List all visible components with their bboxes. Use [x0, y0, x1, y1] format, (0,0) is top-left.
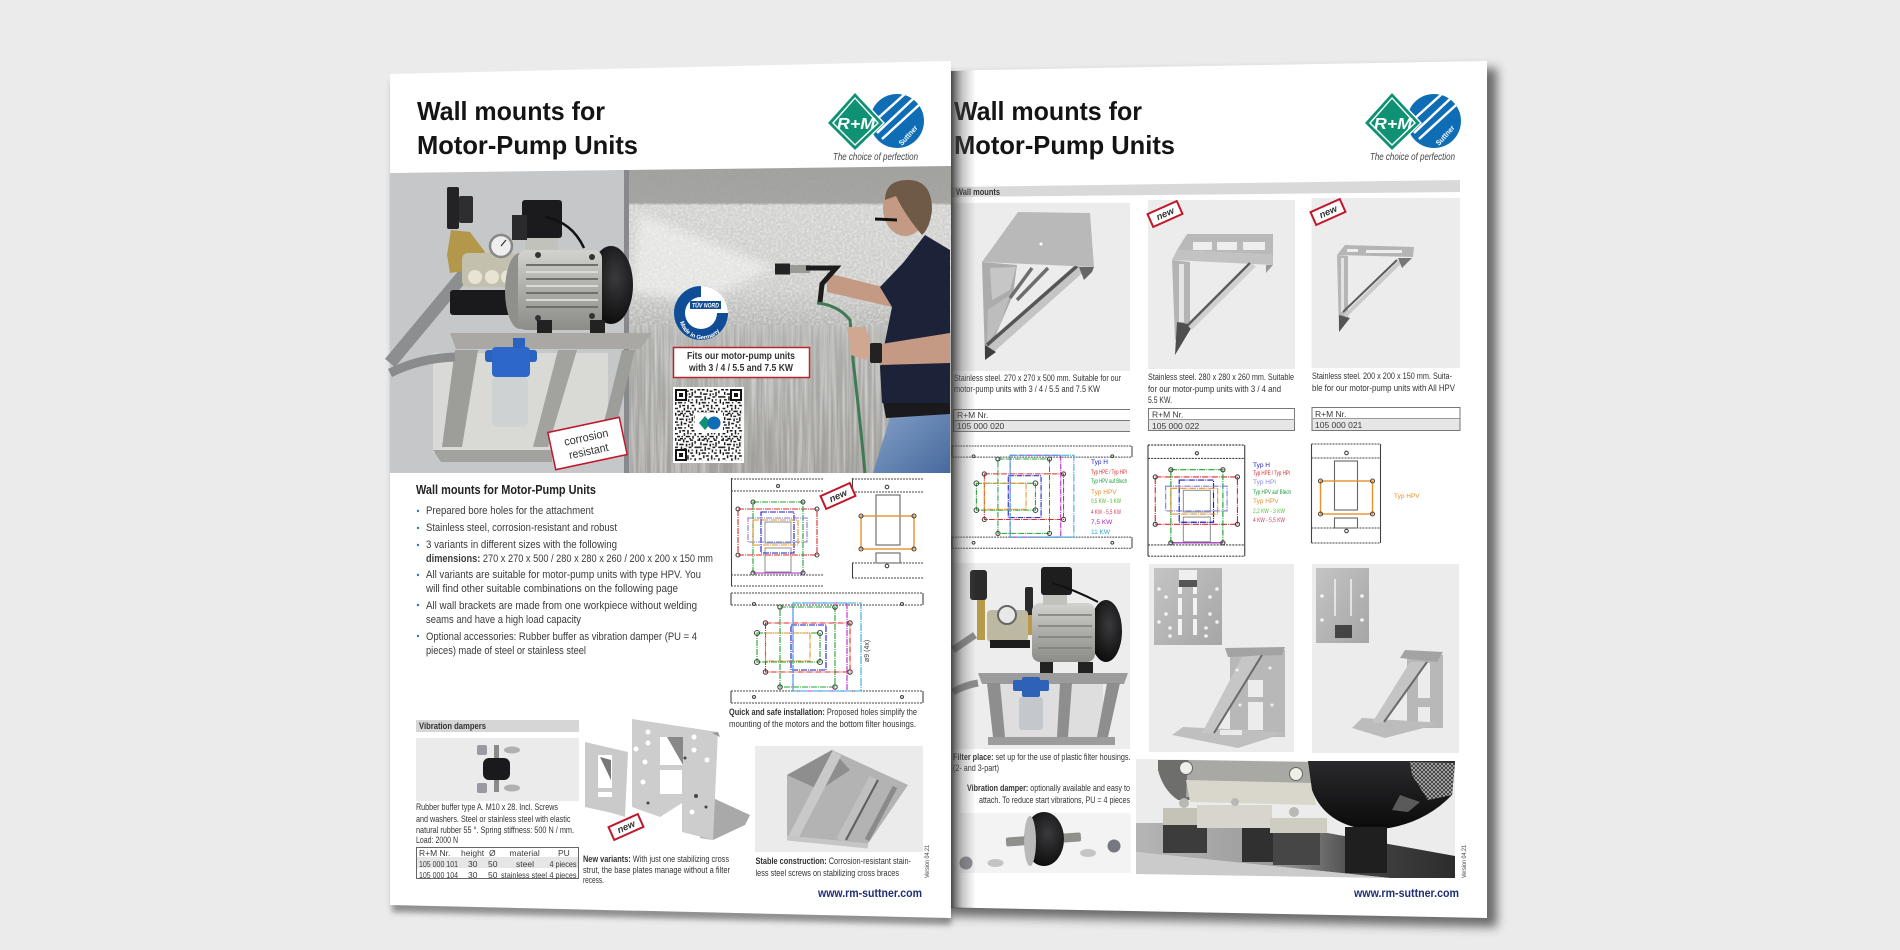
diagram 2 legend	[1253, 462, 1291, 524]
sticker: corrosion resistant: resistant	[568, 442, 610, 462]
new tag	[609, 814, 643, 840]
page shadow	[945, 68, 1497, 927]
website url: www.rm-suttner.com	[817, 888, 922, 900]
new tag	[1148, 201, 1182, 227]
heading: Wall mounts for Motor-Pump Units	[416, 483, 596, 497]
title	[417, 96, 638, 160]
caption 3	[1312, 371, 1455, 393]
table: vibration dampers: height	[461, 848, 485, 858]
rubber buffer description: natural rubber 55 °. Spring stiffness: 500 N / mm.	[416, 825, 574, 835]
callout: fits motor pump units: Fits our motor-pump units	[687, 350, 795, 362]
product image 270 x 270 x 500	[951, 203, 1130, 371]
table: article number 2: R+M Nr.	[1152, 410, 1183, 420]
table: vibration dampers: 4 pieces	[550, 870, 576, 880]
photo: bracket 280 flat and mounted	[1149, 564, 1294, 752]
panel: right brochure page	[930, 61, 1497, 927]
water filter	[485, 338, 537, 427]
new variants caption: New variants: With just one stabilizing cross	[583, 854, 729, 864]
wall bracket	[433, 333, 652, 462]
caption 2: 5.5 KW.	[1148, 395, 1172, 405]
version note: Version 04.21	[1462, 844, 1468, 878]
bullet list: will find other suitable combinations on the following page	[425, 583, 678, 595]
diagram 1 legend: Typ HPV auf Blech	[1091, 478, 1127, 485]
shadow from left page	[951, 70, 976, 909]
drilling diagram B	[852, 478, 923, 578]
bullet list: All wall brackets are made from one workpiece without welding	[426, 600, 697, 612]
new variants caption	[583, 854, 730, 885]
drilling diagram C: ø9 (4x)	[864, 640, 871, 662]
photo caption: vibration damper	[967, 783, 1130, 805]
section band: vibration dampers	[416, 720, 579, 732]
section band: wall mounts: Wall mounts	[956, 187, 1000, 197]
diagram 2 legend: Typ HPE / Typ HPI	[1253, 470, 1290, 477]
caption 1: motor-pump units with 3 / 4 / 5.5 and 7.5 KW	[954, 384, 1100, 394]
table: vibration dampers: steel	[516, 859, 534, 869]
table: article number 3	[1312, 408, 1460, 431]
page sheet	[930, 61, 1487, 918]
diagram 1 legend: Typ H	[1091, 459, 1108, 466]
table: vibration dampers	[416, 848, 579, 880]
website url: www.rm-suttner.com	[1353, 888, 1459, 900]
stable construction caption	[756, 856, 911, 878]
logo: R+M	[837, 116, 876, 133]
new variants caption: recess.	[583, 875, 604, 885]
table: vibration dampers: PU	[558, 848, 570, 858]
motor-pump unit	[447, 187, 633, 333]
photo: bracket 200 flat and mounted	[1312, 564, 1459, 753]
technician	[775, 180, 950, 473]
panel: left brochure page	[385, 61, 954, 928]
image: stable construction	[755, 746, 923, 852]
drilling diagram 3	[1312, 444, 1380, 543]
caption 1: Stainless steel. 270 x 270 x 500 mm. Suitable for our	[954, 373, 1121, 383]
page sheet	[390, 61, 951, 918]
rubber buffer description	[416, 802, 574, 845]
installation caption: Quick and safe installation: Proposed holes simplify the	[729, 707, 917, 717]
new tag: new	[616, 818, 638, 836]
photo caption: filter place: Filter place: set up for the use of plastic filter housings.	[953, 752, 1130, 762]
table: article number 3: 105 000 021	[1315, 420, 1363, 430]
certification badge: Made in Germany	[680, 321, 720, 340]
photo caption: vibration damper: Vibration damper: optionally available and easy to	[967, 783, 1130, 793]
diagram 1 legend: 0,5 KW - 3 KW	[1091, 498, 1122, 505]
logo: R+M	[1374, 116, 1413, 133]
new variants caption: strut, the base plates manage without a filter	[583, 865, 730, 875]
diagram 2 legend: 4 KW - 5,5 KW	[1253, 517, 1286, 524]
diagram 2 legend: 2,2 KW - 3 KW	[1253, 508, 1286, 515]
title: Wall mounts for	[417, 96, 605, 126]
title	[954, 96, 1175, 160]
table: article number 2	[1148, 408, 1295, 431]
bullet list: Prepared bore holes for the attachment	[426, 505, 594, 517]
caption 2: Stainless steel. 280 x 280 x 260 mm. Suitable	[1148, 372, 1294, 382]
stable construction caption: less steel screws on stabilizing cross braces	[756, 868, 899, 878]
rubber buffer description: and washers. Steel or stainless steel with elastic	[416, 814, 571, 824]
diagram 3 legend: Typ HPV	[1394, 493, 1420, 500]
diagram 1 legend: 4 KW - 5,5 KW	[1091, 509, 1122, 516]
QR code	[673, 387, 744, 463]
table: article number 3: R+M Nr.	[1315, 409, 1346, 419]
caption 2: for our motor-pump units with 3 / 4 and	[1148, 384, 1281, 394]
product image 280 x 280 x 260	[1148, 200, 1295, 369]
new tag	[821, 483, 855, 509]
text block: product features	[416, 483, 713, 657]
rubber buffer description: Load: 2000 N	[416, 835, 458, 845]
suction hoses	[390, 273, 465, 373]
sprayed wall	[629, 166, 951, 473]
photo caption: filter place	[953, 752, 1130, 773]
photo: motor feet close-up	[1136, 759, 1455, 878]
product image 200 x 200 x 150	[1312, 198, 1460, 368]
bullet list: seams and have a high load capacity	[426, 614, 581, 626]
caption 3: Stainless steel. 200 x 200 x 150 mm. Suita-	[1312, 371, 1452, 381]
diagram 1 legend: 7,5 KW	[1091, 519, 1113, 526]
bullet list: All variants are suitable for motor-pump units with type HPV. You	[426, 569, 701, 581]
title: Motor-Pump Units	[954, 130, 1175, 160]
section band: vibration dampers: Vibration dampers	[419, 721, 486, 731]
diagram 1 legend: Typ HPV	[1091, 489, 1117, 496]
table: article number 1: 105 000 020	[957, 421, 1005, 431]
caption 1	[954, 373, 1121, 394]
section band: wall mounts	[951, 180, 1460, 197]
bullet list: dimensions: 270 x 270 x 500 / 280 x 280 x 260 / 200 x 200 x 150 mm	[426, 553, 713, 565]
table: article number 1	[953, 409, 1130, 432]
table: vibration dampers: stainless steel	[501, 870, 547, 880]
spray fan	[632, 214, 776, 302]
new tag: new	[1155, 205, 1177, 223]
diagram 2 legend: Typ HPV	[1253, 498, 1279, 505]
logo	[826, 91, 924, 163]
bullet list: Stainless steel, corrosion-resistant and robust	[426, 522, 617, 534]
drilling diagram 1	[952, 446, 1132, 548]
new tag: new	[828, 487, 850, 505]
callout: fits motor pump units	[674, 348, 810, 378]
diagram 1 legend	[1091, 459, 1127, 536]
table: vibration dampers: R+M Nr.	[419, 848, 450, 858]
installation caption: mounting of the motors and the bottom filter housings.	[729, 719, 916, 729]
table: vibration dampers: 50	[488, 870, 498, 880]
page shadow	[392, 70, 951, 925]
image: new bracket variants	[585, 719, 750, 840]
bullet list: pieces) made of steel or stainless steel	[426, 645, 586, 657]
logo	[1363, 91, 1461, 163]
photo caption: vibration damper: attach. To reduce start vibrations, PU = 4 pieces	[979, 795, 1130, 805]
table: article number 1: R+M Nr.	[957, 410, 988, 420]
drilling diagram 2	[1148, 445, 1245, 556]
drilling diagram A	[731, 478, 824, 586]
title: Motor-Pump Units	[417, 130, 638, 160]
callout: fits motor pump units: with 3 / 4 / 5.5 and 7.5 KW	[688, 362, 793, 374]
hero photo	[385, 166, 951, 474]
studio backdrop	[390, 170, 624, 473]
sticker: corrosion resistant	[548, 417, 627, 470]
bullet list: 3 variants in different sizes with the following	[426, 539, 617, 551]
bullet list	[417, 505, 713, 657]
version note: Version 04.21	[925, 844, 931, 878]
caption 3: ble for our motor-pump units with All HPV	[1312, 383, 1455, 393]
diagram 1 legend: 11 KW	[1091, 529, 1111, 536]
table: article number 2: 105 000 022	[1152, 421, 1200, 431]
caption 2	[1148, 372, 1294, 405]
table: vibration dampers: material	[510, 848, 540, 858]
photo: motor-pump unit on bracket	[951, 563, 1130, 749]
photo caption: filter place: (2- and 3-part)	[953, 763, 999, 773]
logo: Suttner	[897, 123, 920, 147]
certification badge	[674, 286, 728, 340]
logo: The choice of perfection	[833, 152, 918, 163]
table: vibration dampers: 105 000 101	[419, 859, 458, 869]
table: vibration dampers: 105 000 104	[419, 870, 458, 880]
table: vibration dampers: 50	[488, 859, 498, 869]
installation caption	[729, 707, 917, 729]
logo: Suttner	[1434, 123, 1457, 147]
diagram 2 legend: Typ HPI	[1253, 479, 1276, 486]
table: vibration dampers: Ø	[489, 848, 496, 858]
rubber buffer description: Rubber buffer type A. M10 x 28. Incl. Screws	[416, 802, 558, 812]
photo: vibration damper	[960, 812, 1130, 873]
sticker: corrosion resistant: corrosion	[563, 428, 610, 449]
title: Wall mounts for	[954, 96, 1142, 126]
table: vibration dampers: 30	[468, 859, 478, 869]
bullet list: Optional accessories: Rubber buffer as vibration damper (PU = 4	[426, 631, 697, 643]
new tag: new	[1318, 203, 1340, 221]
table: vibration dampers: 4 pieces	[550, 859, 576, 869]
stable construction caption: Stable construction: Corrosion-resistant stain-	[756, 856, 911, 866]
new tag	[1311, 199, 1345, 225]
diagram 2 legend: Typ H	[1253, 462, 1270, 469]
diagram 1 legend: Typ HPE / Typ HPI	[1091, 469, 1127, 476]
diagram 2 legend: Typ HPV auf Blech	[1253, 489, 1291, 496]
photo: rubber buffer	[416, 738, 579, 801]
certification badge: TÜV NORD	[692, 300, 719, 310]
table: vibration dampers: 30	[468, 870, 478, 880]
drilling diagram C	[731, 593, 923, 703]
logo: The choice of perfection	[1370, 152, 1455, 163]
